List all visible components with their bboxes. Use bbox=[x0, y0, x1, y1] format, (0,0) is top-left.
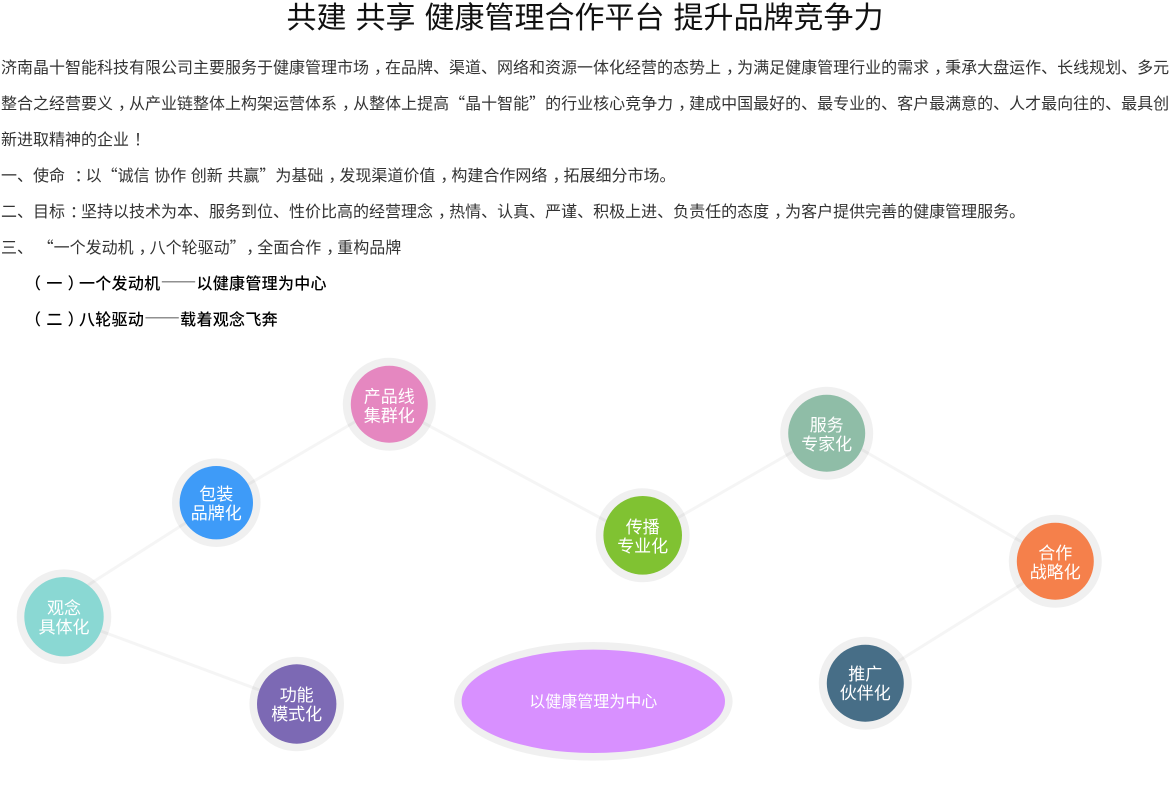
center ellipse bbox=[454, 642, 733, 761]
node: concept: 观念 bbox=[47, 594, 81, 619]
sub-item two: （ 二 ）八轮驱动——载着观念飞奔 bbox=[25, 305, 278, 331]
node: promotion bbox=[819, 637, 912, 730]
node: communication: 专业化 bbox=[617, 532, 668, 557]
intro paragraph: 济南晶十智能科技有限公司主要服务于健康管理市场 ，在品牌、渠道、网络和资源一体化经营的态势上 ，为满足健康管理行业的需求 ，秉承大盘运作、长线规划、多元 bbox=[1, 54, 1169, 78]
node: concept: 具体化 bbox=[38, 613, 90, 638]
node: promotion: 伙伴化 bbox=[840, 679, 891, 704]
strategy line: 三、 “一个发动机 ，八个轮驱动” ，全面合作 ，重构品牌 bbox=[1, 234, 401, 258]
intro paragraph: 新进取精神的企业 ！ bbox=[1, 126, 150, 150]
node: product line bbox=[343, 358, 436, 451]
node: packaging: 包装 bbox=[199, 480, 233, 505]
intro paragraph bbox=[1, 54, 1169, 150]
node: cooperation bbox=[1009, 515, 1102, 608]
node: concept bbox=[17, 569, 111, 664]
sub-item one: （ 一 ）一个发动机——以健康管理为中心 bbox=[25, 269, 327, 295]
node: cooperation: 战略化 bbox=[1030, 558, 1081, 583]
mission line: 一、使命 ：以“诚信 协作 创新 共赢”为基础 ，发现渠道价值 ，构建合作网络 ，拓展细分市场。 bbox=[1, 162, 675, 186]
node: service: 专家化 bbox=[801, 430, 852, 455]
connecting lines bbox=[82, 420, 1027, 691]
node: packaging: 品牌化 bbox=[191, 499, 242, 524]
node: promotion: 推广 bbox=[848, 660, 882, 685]
node: communication bbox=[596, 488, 690, 582]
node: communication: 传播 bbox=[626, 513, 660, 538]
node: function bbox=[249, 657, 344, 751]
node: function: 功能 bbox=[280, 681, 314, 706]
node: function: 模式化 bbox=[271, 700, 322, 725]
node: cooperation: 合作 bbox=[1038, 539, 1072, 564]
node: service: 服务 bbox=[810, 411, 844, 436]
intro paragraph: 整合之经营要义 ，从产业链整体上构架运营体系 ，从整体上提高“晶十智能”的行业核心竞争力 ，建成中国最好的、最专业的、客户最满意的、人才最向往的、最具创 bbox=[1, 90, 1169, 114]
center ellipse: 以健康管理为中心 bbox=[529, 688, 657, 712]
node: service bbox=[780, 387, 873, 480]
node: packaging bbox=[172, 458, 261, 547]
node: product line: 集群化 bbox=[364, 402, 415, 426]
goal line: 二、目标 ：坚持以技术为本、服务到位、性价比高的经营理念 ，热情、认真、严谨、积极上进、负责任的态度 ，为客户提供完善的健康管理服务。 bbox=[1, 198, 1025, 222]
node: product line: 产品线 bbox=[364, 382, 415, 408]
